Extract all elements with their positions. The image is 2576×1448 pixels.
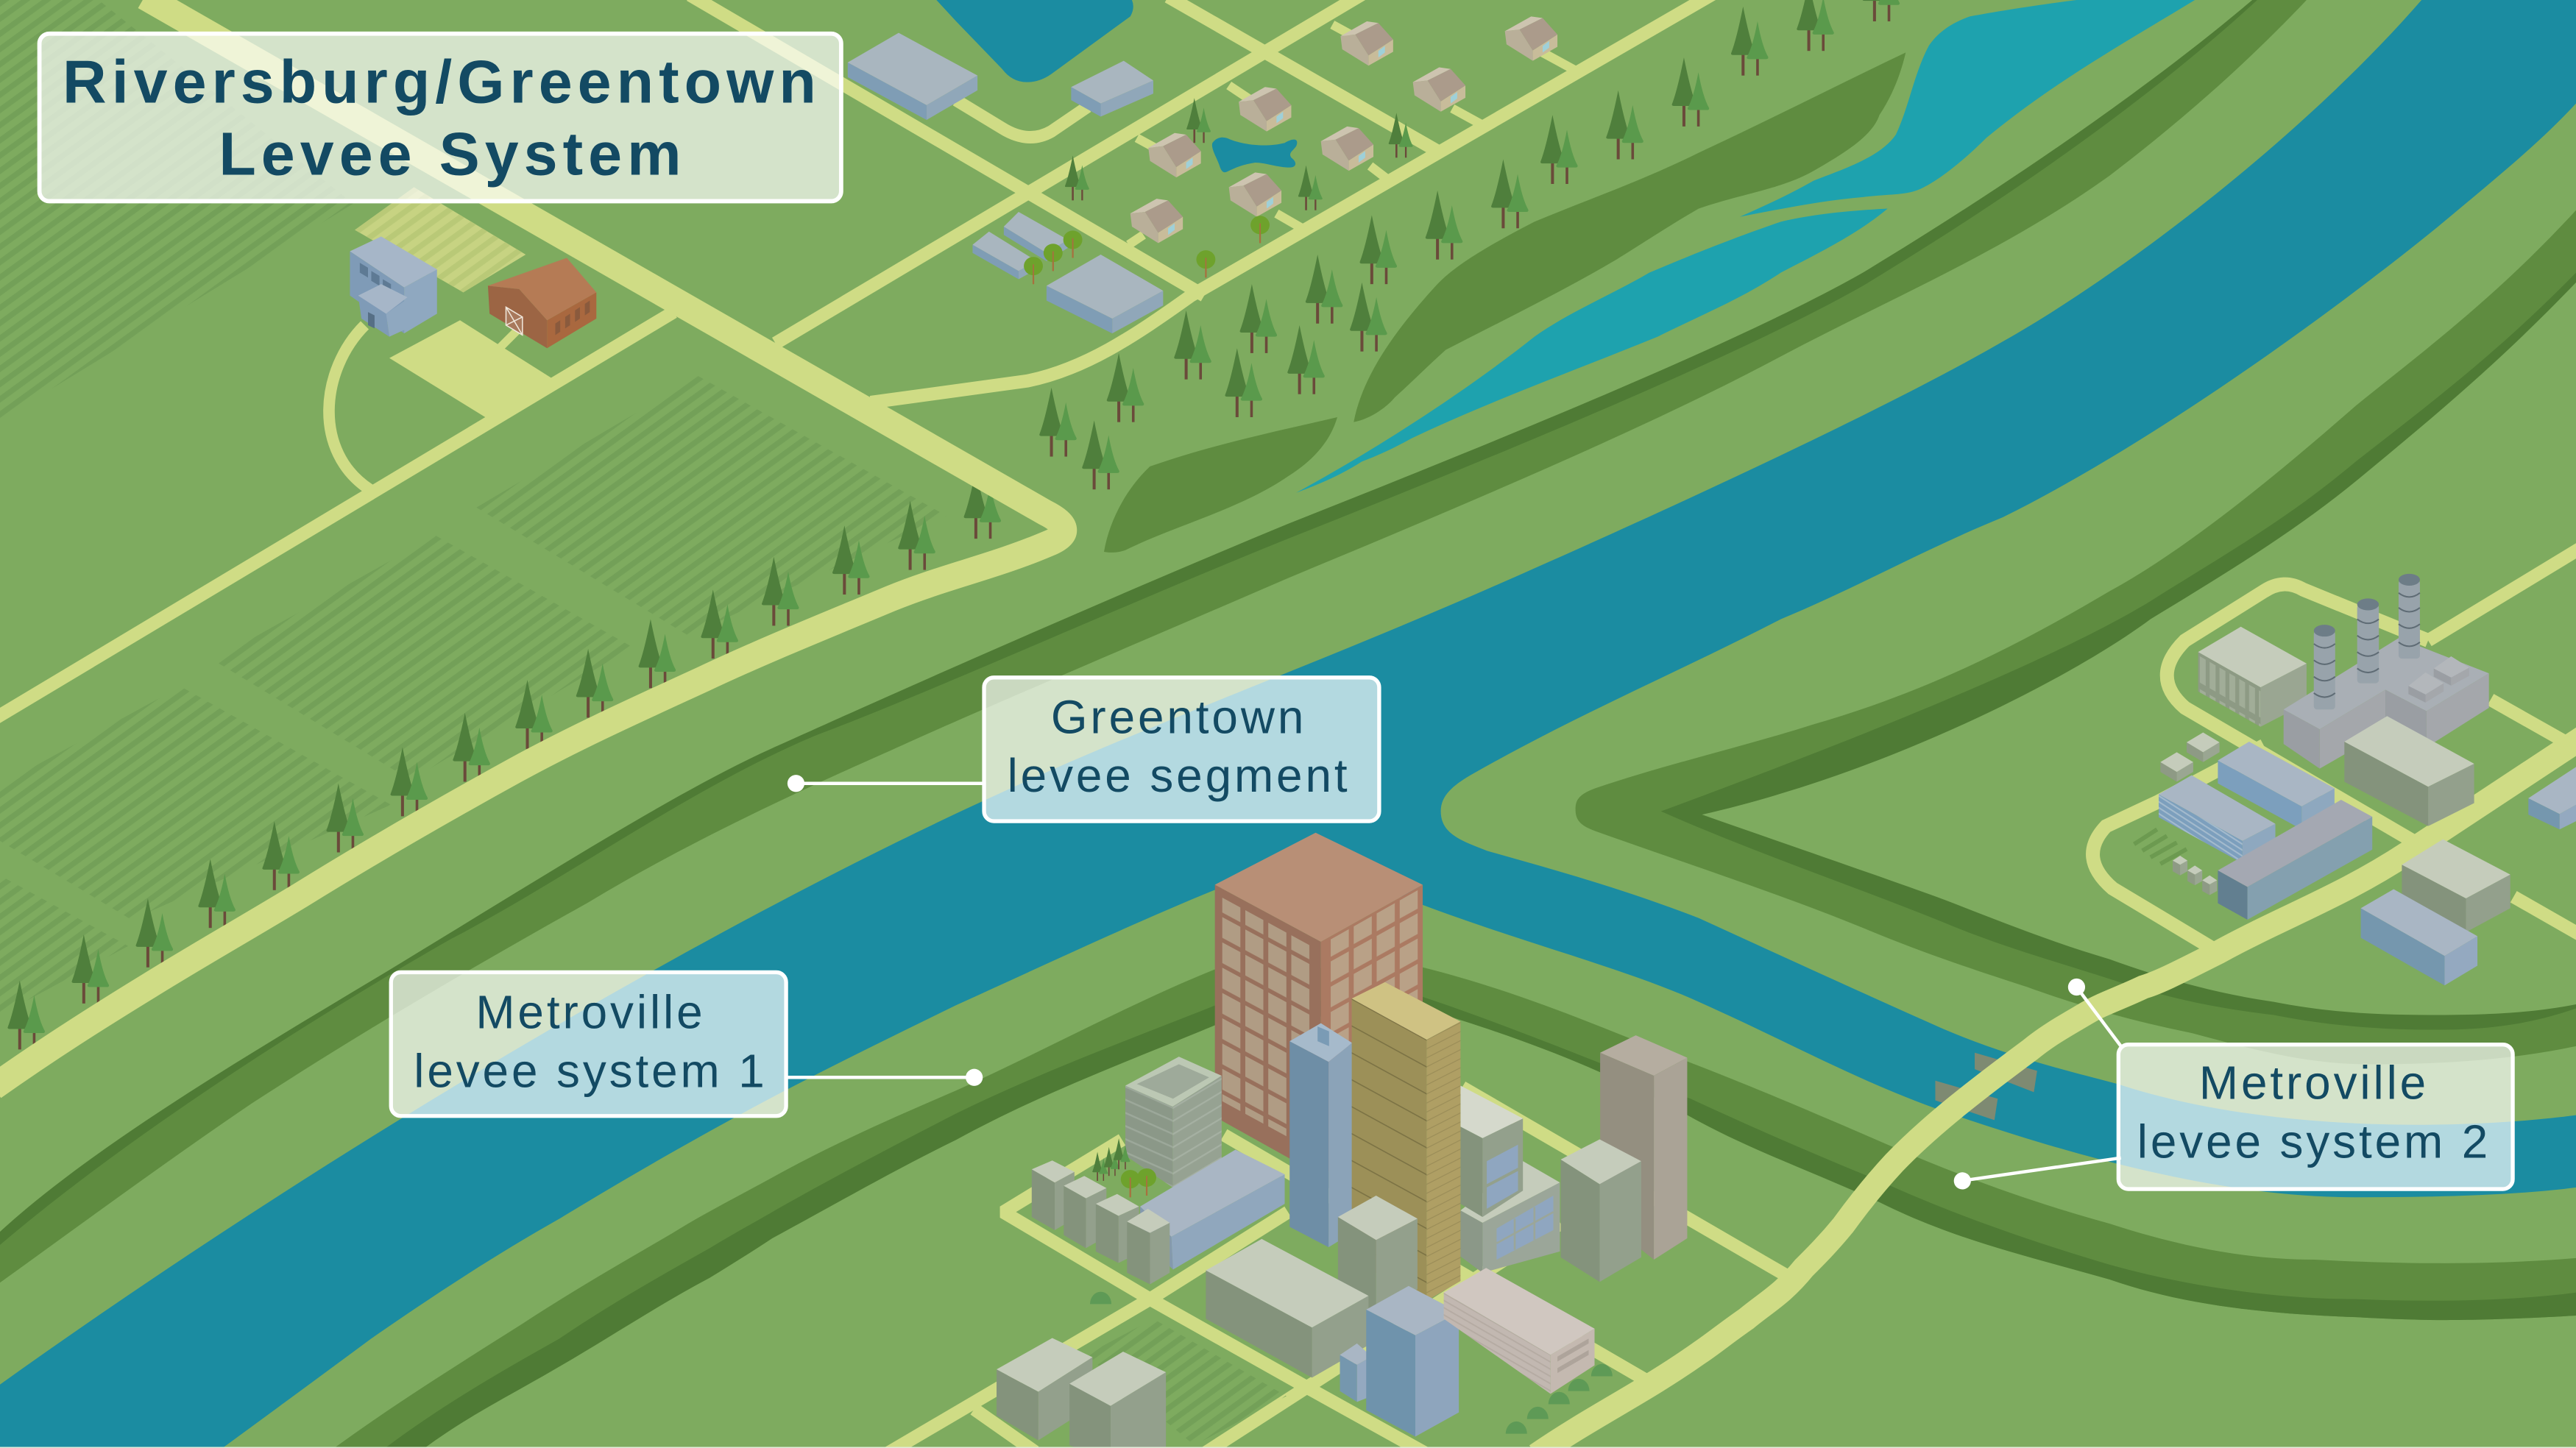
callout leader: Metroville levee system 1 — [785, 1069, 983, 1086]
vented building — [2198, 627, 2307, 727]
city streets — [1003, 1140, 1426, 1448]
Greentown levee crest road — [0, 0, 1064, 1087]
callout: Greentown levee segment: levee segment — [1008, 749, 1351, 802]
side channels — [1296, 0, 2195, 493]
blue office A — [2218, 742, 2335, 829]
blue office B — [2159, 776, 2276, 863]
small storage boxes — [2160, 733, 2220, 895]
bottom edge line — [0, 1447, 2576, 1448]
glass mid-rise — [1125, 1057, 1222, 1188]
bushes — [1090, 1292, 1613, 1434]
beige block east — [2402, 840, 2510, 932]
callout: Metroville levee system 2: levee system 2 — [2137, 1115, 2491, 1168]
Metroville levee system 1 band — [333, 968, 2576, 1448]
blue block far right — [2528, 767, 2576, 829]
row of small blocks — [1032, 1160, 1170, 1285]
callout: Metroville levee system 2 — [2118, 1045, 2513, 1189]
blue tall tower — [1289, 1023, 1352, 1247]
farm office building — [350, 236, 437, 337]
yellow tall tower — [1352, 982, 1460, 1301]
callout: Metroville levee system 1: levee system 1 — [414, 1045, 768, 1098]
beige block centre — [1338, 1196, 1418, 1314]
lower tree line — [7, 469, 1001, 1049]
plant yard stripes — [2134, 829, 2187, 864]
bridge piers — [1935, 1053, 2037, 1120]
long grey-blue building — [2218, 800, 2372, 920]
callout leaders: Metroville levee system 2 — [1954, 979, 2121, 1190]
smokestacks — [2314, 574, 2420, 709]
small blue annex — [1340, 1344, 1372, 1402]
beige tower east — [1561, 1139, 1641, 1282]
houses — [1130, 16, 1557, 243]
callout: Greentown levee segment: Greentown — [1051, 691, 1306, 744]
blue block east — [2361, 889, 2477, 985]
callout: Metroville levee system 1 — [391, 972, 786, 1116]
white mid-rise with podium — [1460, 1085, 1560, 1273]
callout: Metroville levee system 2: Metroville — [2199, 1056, 2429, 1109]
marsh wetlands — [1104, 52, 1906, 553]
south-west blocks — [997, 1338, 1166, 1448]
Metroville downtown — [997, 833, 1687, 1448]
grey tall tower — [1600, 1035, 1687, 1260]
red brick tower — [1215, 833, 1423, 1176]
callout leader: Greentown levee segment — [788, 775, 986, 792]
city field — [1086, 1319, 1287, 1445]
title panel — [40, 34, 841, 201]
town ponds — [936, 0, 1297, 172]
callout: Greentown levee segment — [984, 678, 1379, 821]
long block — [1206, 1239, 1368, 1377]
upper woodland trees — [1039, 0, 1900, 489]
courtyard trees — [1092, 1138, 1156, 1197]
small town trees — [1024, 98, 1413, 284]
parking lot — [389, 320, 553, 419]
town buildings — [848, 33, 1163, 333]
Metroville levee system 2 band — [1576, 210, 2576, 1064]
title text: Levee System — [219, 120, 687, 188]
blue front tower — [1366, 1286, 1459, 1436]
power plant — [2134, 574, 2576, 985]
Greentown levee segment band — [0, 0, 2307, 1282]
main plant block — [2284, 638, 2489, 769]
title text: Riversburg/Greentown — [63, 48, 821, 116]
beige warehouse — [2344, 716, 2474, 826]
low blue building — [1140, 1150, 1285, 1269]
Metroville crossing road — [1536, 734, 2576, 1448]
crop fields — [0, 0, 946, 1015]
farm field beside barn — [355, 187, 526, 292]
callout: Metroville levee system 1: Metroville — [475, 985, 706, 1038]
pink long building — [1444, 1268, 1595, 1394]
barn — [488, 258, 596, 348]
